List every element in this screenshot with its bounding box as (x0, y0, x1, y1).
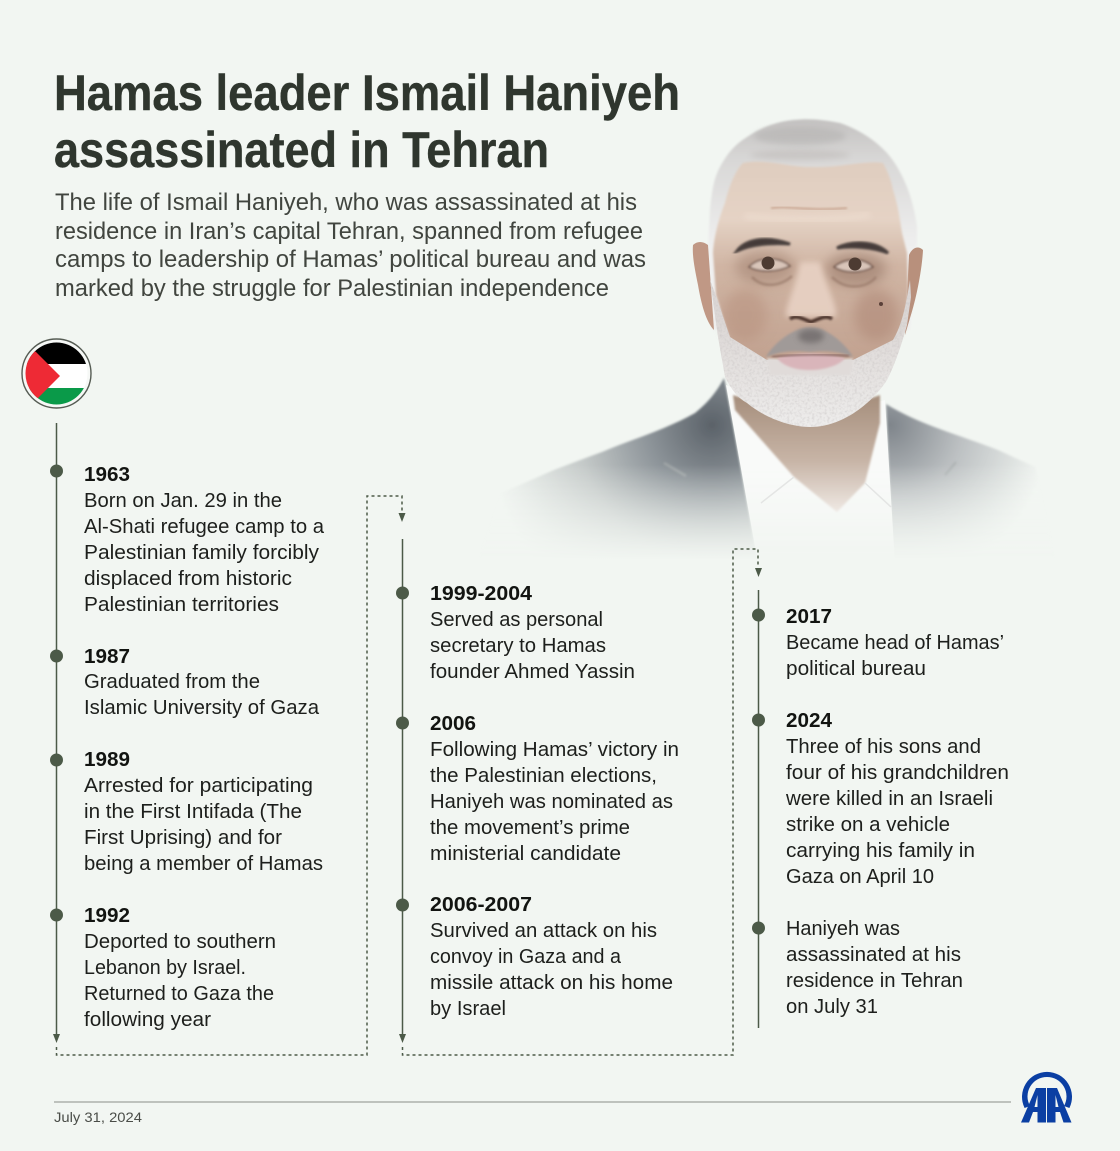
entry 2006: Haniyeh was nominated as (430, 791, 673, 813)
entry 1992: Returned to Gaza the (84, 983, 274, 1005)
title (54, 65, 680, 178)
entry 2024: four of his grandchildren (786, 762, 1009, 784)
entry assassination: on July 31 (786, 996, 878, 1018)
entry 1992: Lebanon by Israel. (84, 957, 246, 979)
entry 1999-2004 (430, 583, 635, 683)
entry 1963: 1963 (84, 464, 130, 486)
entry 2006-2007: missile attack on his home (430, 972, 673, 994)
entry 1987: 1987 (84, 646, 130, 668)
entry 2006: 2006 (430, 713, 476, 735)
entry 2006-2007 (430, 894, 673, 1020)
entry 2024: Gaza on April 10 (786, 866, 934, 888)
entry 1992: Deported to southern (84, 931, 276, 953)
entry 1963: Born on Jan. 29 in the (84, 490, 282, 512)
entry 2024: carrying his family in (786, 840, 975, 862)
entry 1989: being a member of Hamas (84, 853, 323, 875)
timeline dots column 3 (752, 608, 765, 934)
entry 2024: 2024 (786, 710, 833, 732)
entry 2024: Three of his sons and (786, 736, 981, 758)
entry 1963: Al-Shati refugee camp to a (84, 516, 325, 538)
subtitle: The life of Ismail Haniyeh, who was assassinated at his (55, 189, 637, 216)
subtitle (55, 189, 646, 302)
entry 2006-2007: convoy in Gaza and a (430, 946, 622, 968)
entry 2017 (786, 606, 1004, 680)
entry assassination (786, 918, 963, 1018)
entry 1999-2004: 1999-2004 (430, 583, 533, 605)
entry 1999-2004: founder Ahmed Yassin (430, 661, 635, 683)
subtitle: camps to leadership of Hamas’ political bureau and was (55, 246, 646, 273)
entry 1963 (84, 464, 325, 616)
timeline dots column 1 (50, 464, 63, 922)
entry 1992: 1992 (84, 905, 130, 927)
entry 1989: Arrested for participating (84, 775, 313, 797)
entry assassination: Haniyeh was (786, 918, 900, 940)
portrait photo (470, 119, 1060, 580)
entry 1999-2004: Served as personal (430, 609, 603, 631)
entry 2017: Became head of Hamas’ (786, 632, 1004, 654)
entry 2024: were killed in an Israeli (785, 788, 993, 810)
title: Hamas leader Ismail Haniyeh (54, 65, 680, 121)
entry 2006: the movement’s prime (430, 817, 630, 839)
entry 1992 (84, 905, 276, 1031)
entry 1989: 1989 (84, 749, 130, 771)
entry 1999-2004: secretary to Hamas (430, 635, 606, 657)
entry 1989: First Uprising) and for (84, 827, 282, 849)
timeline dots column 2 (396, 586, 409, 912)
entry 1987 (84, 646, 320, 719)
entry 1989 (84, 749, 323, 875)
footer rule (54, 1102, 1011, 1103)
entry assassination: residence in Tehran (786, 970, 963, 992)
timeline connectors and arrows (53, 423, 762, 1055)
entry 1963: displaced from historic (84, 568, 292, 590)
entry 1963: Palestinian territories (84, 594, 279, 616)
icon: AA logo (1021, 1072, 1072, 1122)
entry 2006-2007: Survived an attack on his (430, 920, 657, 942)
entry 2006: Following Hamas’ victory in (430, 739, 679, 761)
entry 1987: Islamic University of Gaza (84, 697, 320, 719)
entry 2006: the Palestinian elections, (430, 765, 657, 787)
entry 1963: Palestinian family forcibly (84, 542, 319, 564)
timeline column 1 (50, 464, 325, 1031)
subtitle: residence in Iran’s capital Tehran, spanned from refugee (55, 218, 643, 245)
title: assassinated in Tehran (54, 122, 549, 178)
entry 1989: in the First Intifada (The (84, 801, 302, 823)
timeline column 3 (752, 606, 1009, 1018)
entry 2006 (430, 713, 679, 865)
entry 2017: 2017 (786, 606, 832, 628)
entry assassination: assassinated at his (786, 944, 961, 966)
entry 2017: political bureau (786, 658, 926, 680)
entry 1992: following year (84, 1009, 211, 1031)
entry 2006-2007: 2006-2007 (430, 894, 532, 916)
entry 1987: Graduated from the (84, 671, 260, 693)
subtitle: marked by the struggle for Palestinian independence (55, 275, 609, 302)
timeline column 2 (396, 583, 679, 1020)
entry 2024 (785, 710, 1009, 888)
entry 2006-2007: by Israel (430, 998, 506, 1020)
entry 2006: ministerial candidate (430, 843, 621, 865)
date: July 31, 2024 (54, 1109, 142, 1125)
icon: Palestinian flag (20, 339, 91, 410)
entry 2024: strike on a vehicle (786, 814, 950, 836)
